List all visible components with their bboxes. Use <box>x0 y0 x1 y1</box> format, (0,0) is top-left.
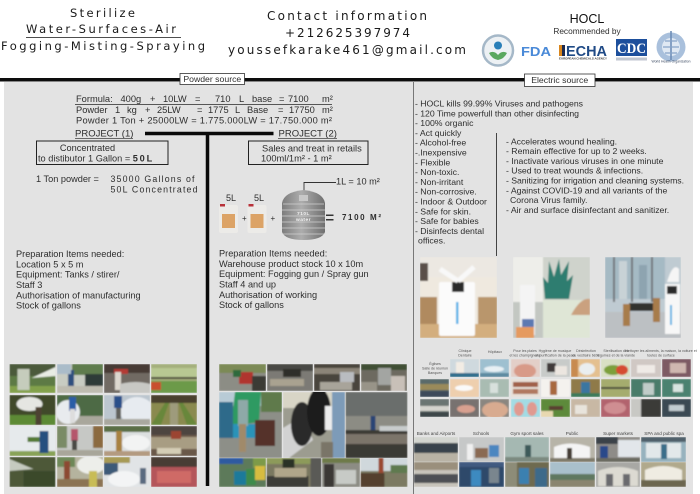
list: HOCL benefits <box>506 136 684 215</box>
list: HOCL benefits: Corona Virus family. <box>510 195 587 205</box>
formula block: Base <box>247 105 268 115</box>
photo grid labels: public places: SPA and public spa <box>644 431 684 436</box>
photo grid labels: uses by venue: légumes et de la viande <box>597 354 635 358</box>
text: preparation items project 2 <box>219 248 369 310</box>
box: concentrated: to distibutor 1 Gallon = 50L <box>38 154 154 164</box>
text: preparation items project 1: Stock of gallons <box>16 301 81 311</box>
diagram: jerrycans and tank: water <box>295 217 311 223</box>
diagram: jerrycans and tank: + <box>242 214 247 223</box>
recommended by heading: HOCL <box>570 12 604 26</box>
diagram: jerrycans and tank: 7100 M² <box>342 213 381 222</box>
logo: CDC: CDC <box>617 41 646 57</box>
project connector bar <box>145 134 274 486</box>
diagram: jerrycans and tank: 5L <box>226 193 236 203</box>
title: Sterilize <box>70 6 135 20</box>
text: preparation items project 2: Warehouse product stock 10 x 10m <box>219 259 364 269</box>
list divider <box>495 133 498 256</box>
list: HOCL properties: - Non-toxic. <box>415 167 459 177</box>
formula block: L <box>235 105 240 115</box>
list: HOCL properties: - Safe for babies <box>415 216 479 226</box>
photo grid labels: uses by venue: et purification de la peau <box>535 354 575 358</box>
logo: EPA <box>483 36 513 66</box>
formula block: 1775 <box>208 105 229 115</box>
list: HOCL properties: - 120 Time powerfull than other disinfecting <box>415 108 579 118</box>
formula block: 10LW <box>163 94 187 104</box>
text: powder yield: 35000 Gallons of <box>110 174 195 184</box>
text: powder yield <box>36 174 198 194</box>
panel divider <box>413 82 414 494</box>
logo: WHO <box>652 31 691 64</box>
text: preparation items project 1: Preparation Items needed: <box>16 249 124 259</box>
list: HOCL properties: - Flexible <box>415 157 450 167</box>
text: preparation items project 1: Authorisation of manufacturing <box>16 290 141 300</box>
formula block: Powder 1 Ton + 25000LW = 1.775.000LW = 17.750.000 m² <box>76 116 332 126</box>
photo grid labels: uses by venue: du vestiaire bébé <box>572 354 600 358</box>
contact information <box>228 9 466 57</box>
logo: FDA: FDA <box>521 44 552 59</box>
photo grid labels: uses by venue: Nettoyer les aliments, la maison, la voiture et <box>625 349 697 353</box>
photo grid: disinfection tunnels <box>414 437 686 487</box>
photo grid labels: uses by venue: toutes de surface <box>647 354 675 358</box>
label: electric source <box>524 74 595 86</box>
photo grid labels: public places: Gym sport sales <box>510 431 544 436</box>
formula block: + <box>150 94 155 104</box>
formula block: base <box>252 94 272 104</box>
formula block: m² <box>322 105 333 115</box>
list: HOCL benefits: - Used to treat wounds & infections. <box>506 166 643 176</box>
photo grid labels: public places <box>417 431 684 436</box>
text: preparation items project 1: Equipment: Tanks / stirer/ <box>16 270 120 280</box>
diagram: jerrycans and tank: 710L <box>297 211 310 217</box>
list: HOCL properties: - Disinfects dental <box>415 226 484 236</box>
contact information: youssefkarake461@gmail.com <box>228 43 466 57</box>
text: preparation items project 1 <box>16 249 141 311</box>
logo: ECHA: ECHA <box>566 44 608 60</box>
photo grid labels: uses by venue: Églises <box>429 361 441 366</box>
list: HOCL properties: - HOCL kills 99.99% Viruses and pathogens <box>415 98 584 108</box>
formula block: = <box>197 105 202 115</box>
diagram: jerrycans and tank: 5L <box>254 193 264 203</box>
text: preparation items project 2: Stock of gallons <box>219 300 284 310</box>
formula block: = <box>279 94 284 104</box>
logo: WHO: World Health Organization <box>652 60 691 64</box>
list: HOCL properties: - Indoor & Outdoor <box>415 196 487 206</box>
list: HOCL properties: - Safe for skin. <box>415 206 471 216</box>
heading: project 1: PROJECT (1) <box>75 128 133 140</box>
photo grid labels: uses by venue: Hôpitaux <box>488 350 502 354</box>
contact information: +212625397974 <box>285 26 410 40</box>
recommended by heading: Recommended by <box>553 26 622 36</box>
photo grid labels: uses by venue: Sterilisation des <box>603 349 629 353</box>
photo collage: waste and treatment <box>219 364 408 487</box>
title: Fogging-Misting-Spraying <box>1 39 205 53</box>
recommended by heading <box>553 12 622 36</box>
formula block: Formula: <box>76 94 113 104</box>
list: HOCL benefits: - Remain effective for up to 2 weeks. <box>506 146 647 156</box>
diagram: jerrycans and tank: + <box>270 214 276 223</box>
text: preparation items project 2: Authorisation of working <box>219 290 317 300</box>
list: HOCL properties: -.Inexpensive <box>415 148 467 158</box>
photo: humidifier in living room <box>420 258 497 338</box>
list: HOCL benefits: - Inactivate various viruses in one minute <box>506 156 664 166</box>
text: preparation items project 2: Staff 4 and up <box>219 280 276 290</box>
panel: powder source background <box>4 82 413 494</box>
header rule <box>0 78 700 82</box>
list: HOCL benefits: - Air and surface disinfectant and sanitizer. <box>506 205 669 215</box>
formula block: Powder <box>76 105 108 115</box>
formula block: kg <box>127 105 137 115</box>
text: powder yield: 1 Ton powder = <box>36 174 99 184</box>
heading: project 2: PROJECT (2) <box>278 128 337 140</box>
formula block: 710 <box>215 94 231 104</box>
photo grid labels: uses by venue: Banques <box>428 371 442 375</box>
list: HOCL properties: offices. <box>418 236 445 246</box>
box: sales and treat: Sales and treat in retails <box>262 144 362 154</box>
logo: CDC <box>616 39 647 60</box>
photo grid labels: public places: Banks and Airports <box>417 431 456 436</box>
photo: humidifier with plant <box>513 257 590 338</box>
formula block: 1 <box>115 105 120 115</box>
photo grid labels: uses by venue: Clinique <box>458 349 472 353</box>
list: HOCL properties: - Alcohol-free <box>415 138 466 148</box>
box: sales and treat <box>248 141 368 164</box>
list: HOCL properties: - Non-irritant <box>415 177 464 187</box>
text: preparation items project 1: Staff 3 <box>16 280 42 290</box>
box: sales and treat: 100ml/1m² - 1 m² <box>261 154 332 164</box>
formula block: 25LW <box>157 105 181 115</box>
list: HOCL properties <box>415 98 584 246</box>
panel: electric source background <box>414 82 693 494</box>
list: HOCL benefits: - Sanitizing for irrigation and cleaning systems. <box>506 176 684 186</box>
logo: ECHA: EUROPEAN CHEMICALS AGENCY <box>559 56 607 60</box>
photo grid labels: uses by venue: Hygiène de musique <box>539 349 571 353</box>
formula block: 7100 <box>288 94 309 104</box>
formula block: = <box>278 105 283 115</box>
photo grid labels: uses by venue: et les champignons <box>510 354 541 358</box>
photo grid: HOCL applications <box>420 359 691 418</box>
photo grid labels: uses by venue: Désinfection <box>576 349 596 353</box>
list: HOCL benefits: - Against COVID-19 and all variants of the <box>506 185 667 195</box>
text: preparation items project 2: Preparation Items needed: <box>219 248 327 258</box>
box: concentrated: Concentrated <box>60 143 115 153</box>
list: HOCL properties: - Act quickly <box>415 128 462 138</box>
formula block: 17750 <box>289 105 315 115</box>
formula block: m² <box>322 94 333 104</box>
formula block: + <box>145 105 150 115</box>
photo grid: fogging and markets <box>10 364 197 487</box>
label: electric source: Electric source <box>531 75 588 85</box>
title: Water-Surfaces-Air <box>26 22 176 36</box>
formula block: L <box>239 94 244 104</box>
photo grid labels: public places: Schools <box>473 431 490 436</box>
title <box>1 6 205 53</box>
photo grid labels: uses by venue <box>422 349 697 375</box>
label: powder source: Powder source <box>183 74 241 84</box>
formula block: 400g <box>120 94 141 104</box>
photo grid labels: public places: Super markets <box>603 431 634 436</box>
diagram: jerrycans and tank <box>219 176 381 240</box>
text: powder yield: 50L Concentrated <box>110 184 198 194</box>
box: concentrated <box>36 141 168 164</box>
formula block: = <box>195 94 200 104</box>
contact information: Contact information <box>267 9 427 23</box>
text: preparation items project 1: Location 5 x 5 m <box>16 259 84 269</box>
list: HOCL properties: - 100% organic <box>415 118 474 128</box>
photo: humidifier in meeting room <box>605 257 681 338</box>
text: preparation items project 2: Equipment: Fogging gun / Spray gun <box>219 269 369 279</box>
diagram: jerrycans and tank: 1L = 10 m² <box>336 176 380 186</box>
photo grid labels: uses by venue: Dentaire <box>458 354 472 358</box>
photo grid labels: uses by venue: Pour les plaies <box>513 349 537 353</box>
list: HOCL properties: - Non-corrosive. <box>415 187 477 197</box>
photo grid labels: public places: Public <box>566 431 579 436</box>
formula block <box>75 94 333 126</box>
list: HOCL benefits: - Accelerates wound healing. <box>506 136 617 146</box>
photo grid labels: uses by venue: Salle de réunion <box>422 366 448 370</box>
